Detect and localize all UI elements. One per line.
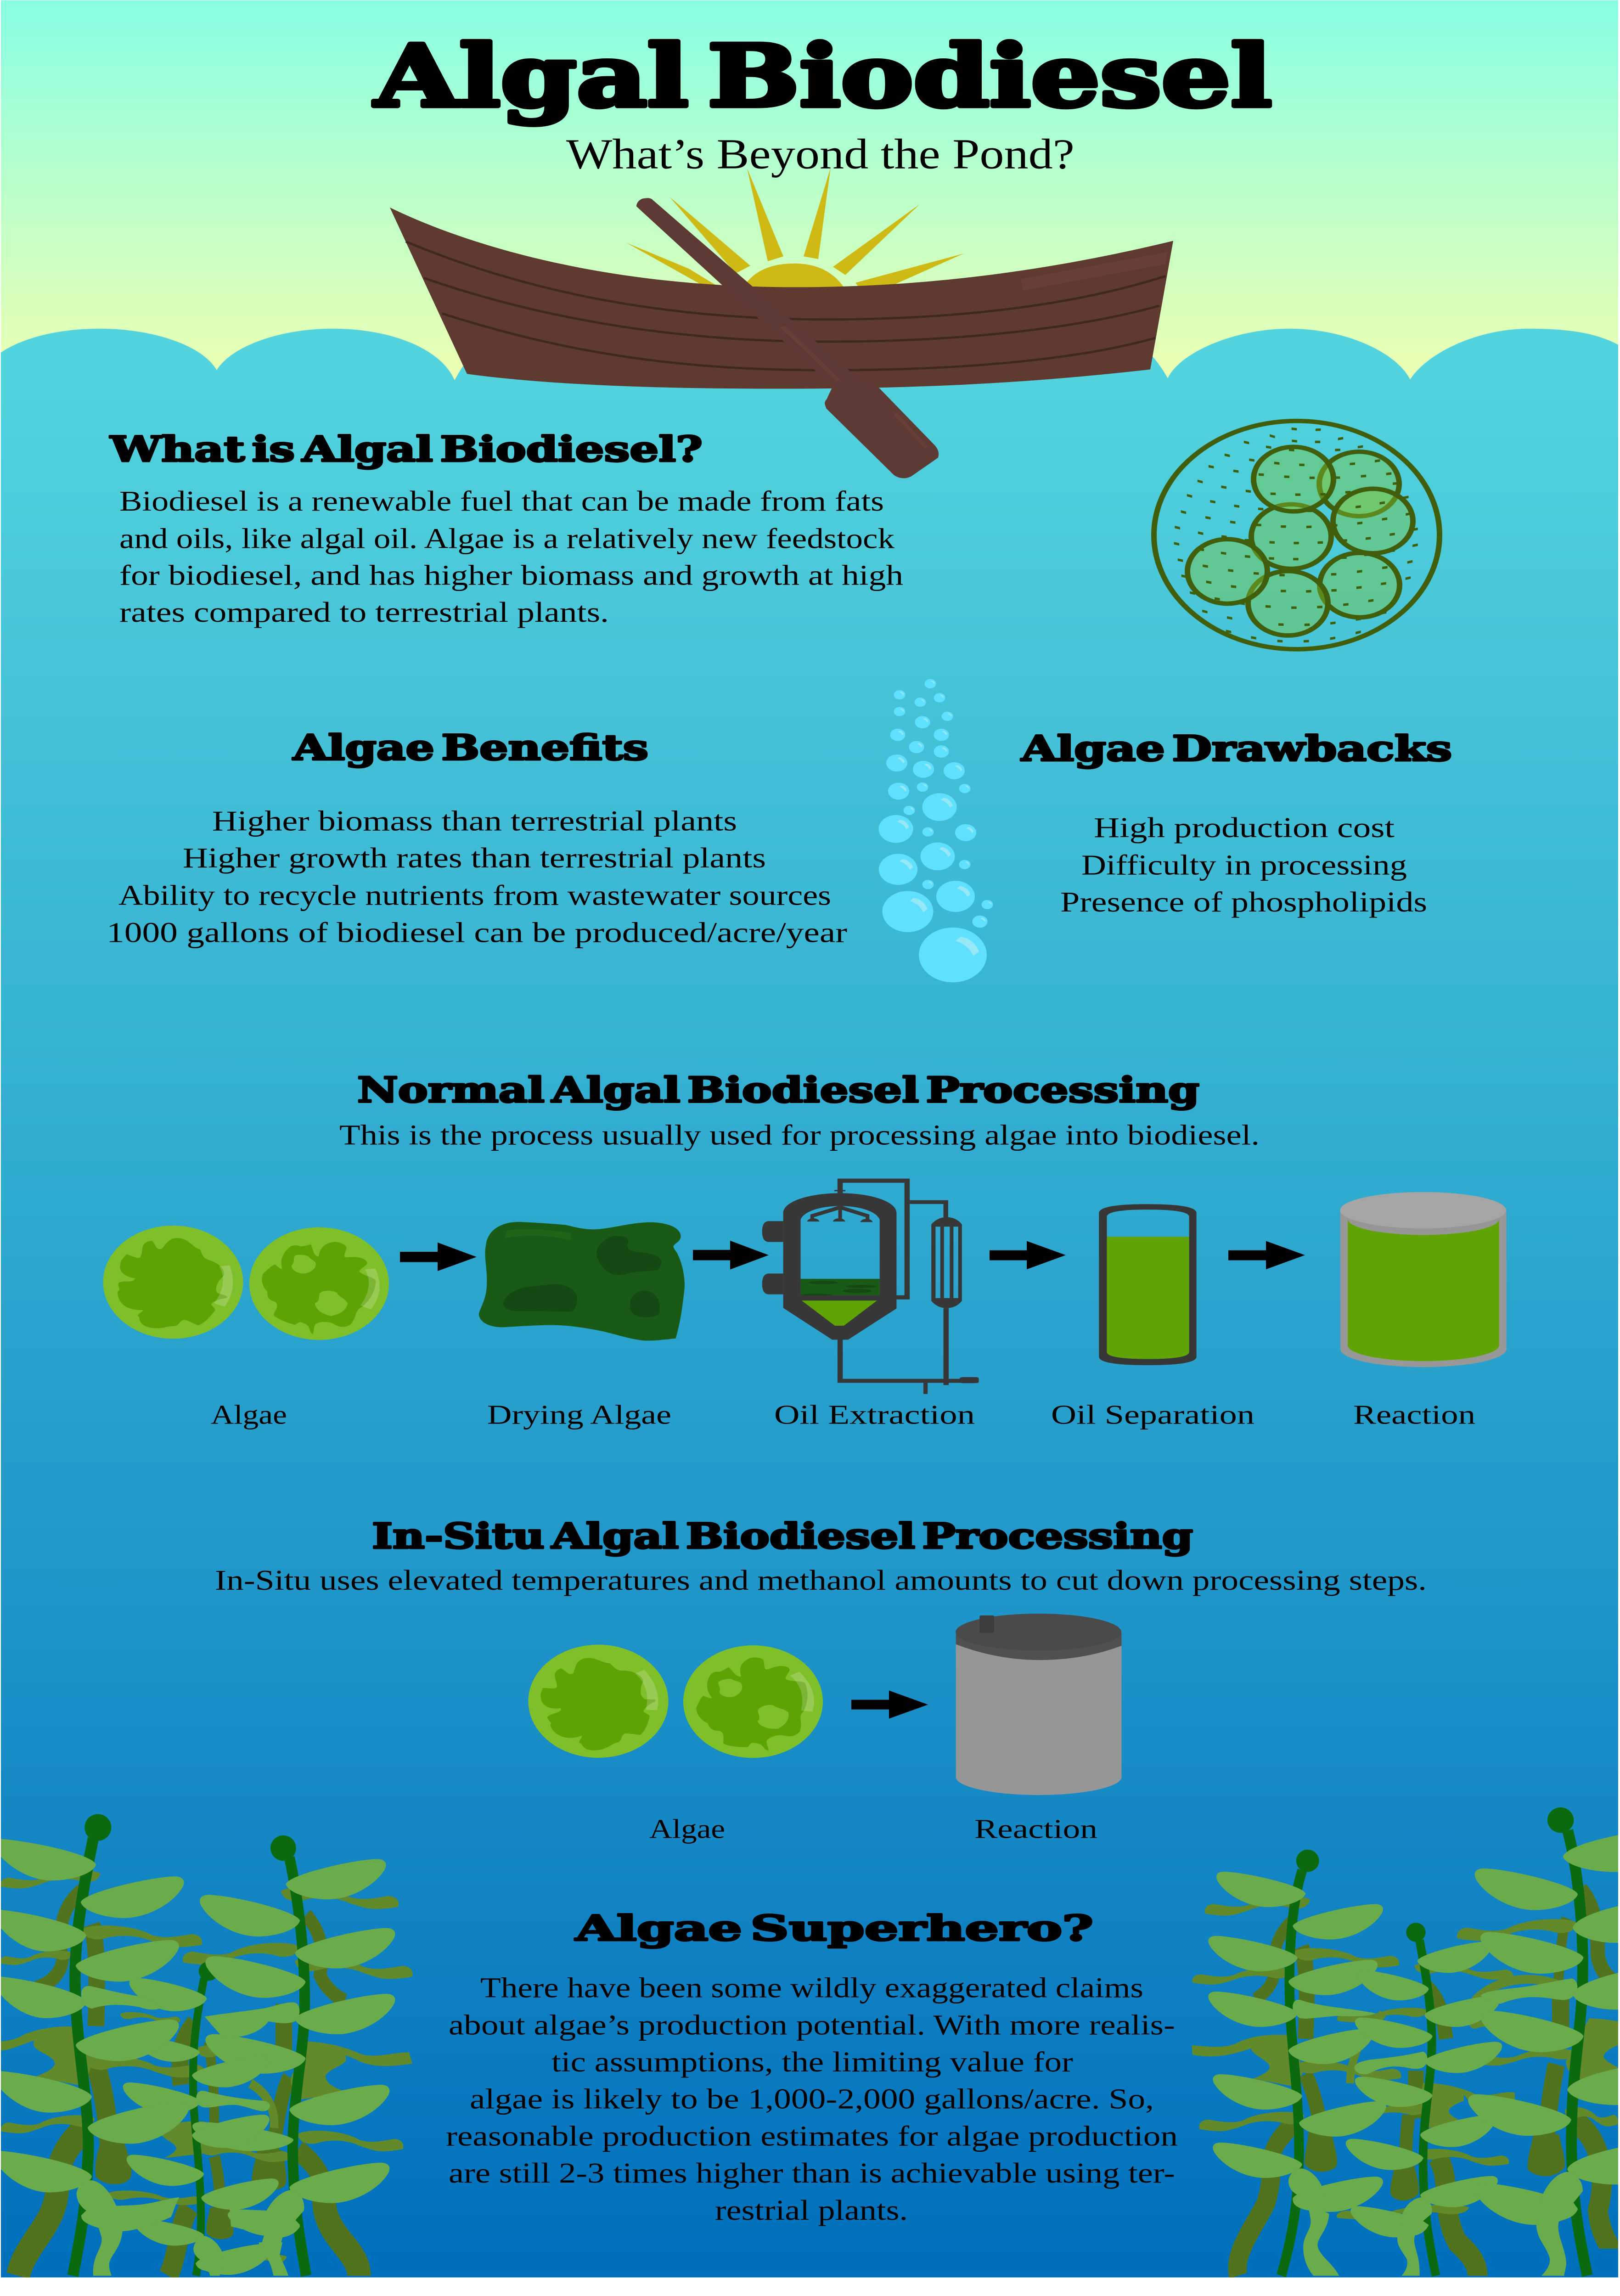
- back leaves: [1192, 1896, 1619, 2219]
- heading: algae superhero: Algae Superhero?: [575, 1908, 1093, 1949]
- text: benefits list: [107, 805, 847, 949]
- sky background: [0, 0, 1620, 408]
- seaweed: right cluster: [1192, 1807, 1619, 2276]
- label: in-situ reaction: Reaction: [974, 1813, 1097, 1844]
- arrow 3: [990, 1241, 1066, 1269]
- front stems: [73, 1839, 306, 2276]
- text: benefits list: Higher growth rates than terrestrial plants: [183, 842, 766, 874]
- heading: what is algal biodiesel: What is Algal Biodiesel?: [110, 429, 703, 470]
- title: Algal Biodiesel: [374, 27, 1272, 126]
- front leaves: [1208, 1835, 1619, 2276]
- text: definition: and oils, like algal oil. Algae is a relatively new feedstock: [119, 523, 895, 555]
- subtitle: What’s Beyond the Pond?: [566, 130, 1074, 178]
- label: in-situ algae: Algae: [649, 1813, 725, 1844]
- text: benefits list: Ability to recycle nutrients from wastewater sources: [118, 880, 831, 912]
- icon: oil extraction vessel: [762, 1179, 979, 1394]
- heading: normal processing: Normal Algal Biodiesel Processing: [357, 1070, 1199, 1111]
- text: algae superhero body: about algae’s production potential. With more realis-: [449, 2009, 1175, 2041]
- label: algae: Algae: [211, 1399, 287, 1430]
- icon: oil separation tube: [1099, 1204, 1197, 1365]
- icon: rowing boat: [390, 208, 1173, 389]
- icon: algae colony: [1154, 421, 1440, 649]
- text: drawbacks list: Difficulty in processing: [1081, 849, 1407, 881]
- arrow 4: [1228, 1241, 1305, 1269]
- text: drawbacks list: High production cost: [1094, 812, 1395, 844]
- arrow 2: [693, 1241, 769, 1270]
- seaweed: left cluster: [0, 1814, 412, 2276]
- label: oil extraction: Oil Extraction: [774, 1399, 975, 1430]
- heading: in-situ processing: In-Situ Algal Biodiesel Processing: [372, 1516, 1193, 1557]
- text: definition: Biodiesel is a renewable fuel that can be made from fats: [119, 485, 884, 517]
- back leaves: [0, 1870, 412, 2267]
- icon: drying algae: [479, 1222, 685, 1340]
- text: drawbacks list: [1060, 812, 1427, 918]
- icon: in-situ reaction tank: [956, 1614, 1121, 1795]
- heading: algae drawbacks: Algae Drawbacks: [1021, 729, 1452, 769]
- text: algae superhero body: algae is likely to be 1,000-2,000 gallons/acre. So,: [470, 2083, 1154, 2115]
- icon: sun behind boat: [626, 168, 964, 293]
- icon: algae cell 2: [249, 1227, 389, 1340]
- icon: algae cell 1: [103, 1226, 243, 1339]
- arrow: in-situ: [851, 1690, 928, 1719]
- text: drawbacks list: Presence of phospholipids: [1060, 886, 1427, 918]
- text: benefits list: 1000 gallons of biodiesel can be produced/acre/year: [107, 917, 847, 949]
- icon: rising bubbles: [878, 679, 993, 982]
- back stems: [18, 1890, 359, 2276]
- label: reaction: Reaction: [1353, 1399, 1475, 1430]
- front leaves: [0, 1839, 395, 2276]
- heading: algae benefits: Algae Benefits: [292, 727, 648, 768]
- icon: oar: [636, 198, 939, 478]
- text: benefits list: Higher biomass than terrestrial plants: [212, 805, 737, 837]
- text: algae superhero body: restrial plants.: [715, 2195, 908, 2226]
- text: algae superhero body: reasonable production estimates for algae production: [446, 2120, 1178, 2152]
- icon: in-situ algae cell 2: [664, 1629, 843, 1774]
- text: in-situ intro: In-Situ uses elevated temperatures and methanol amounts to cut down processing steps.: [215, 1564, 1427, 1596]
- text: algae superhero body: tic assumptions, the limiting value for: [551, 2046, 1073, 2078]
- text: normal processing intro: This is the process usually used for processing algae into biodiesel.: [339, 1120, 1260, 1151]
- icon: in-situ algae cell 1: [508, 1629, 688, 1774]
- text: algae superhero body: There have been some wildly exaggerated claims: [480, 1972, 1143, 2004]
- front stems: [1281, 1831, 1587, 2276]
- text: algae superhero body: [446, 1972, 1178, 2226]
- text: definition: [119, 485, 903, 628]
- arrow 1: [400, 1243, 477, 1271]
- text: algae superhero body: are still 2-3 times higher than is achievable using ter-: [449, 2157, 1175, 2189]
- text: definition: for biodiesel, and has higher biomass and growth at high: [119, 559, 903, 591]
- label: oil separation: Oil Separation: [1051, 1399, 1254, 1430]
- label: drying algae: Drying Algae: [487, 1399, 671, 1430]
- text: definition: rates compared to terrestrial plants.: [119, 597, 609, 628]
- back stems: [1238, 1890, 1615, 2276]
- icon: reaction tank with green fuel: [1340, 1192, 1507, 1367]
